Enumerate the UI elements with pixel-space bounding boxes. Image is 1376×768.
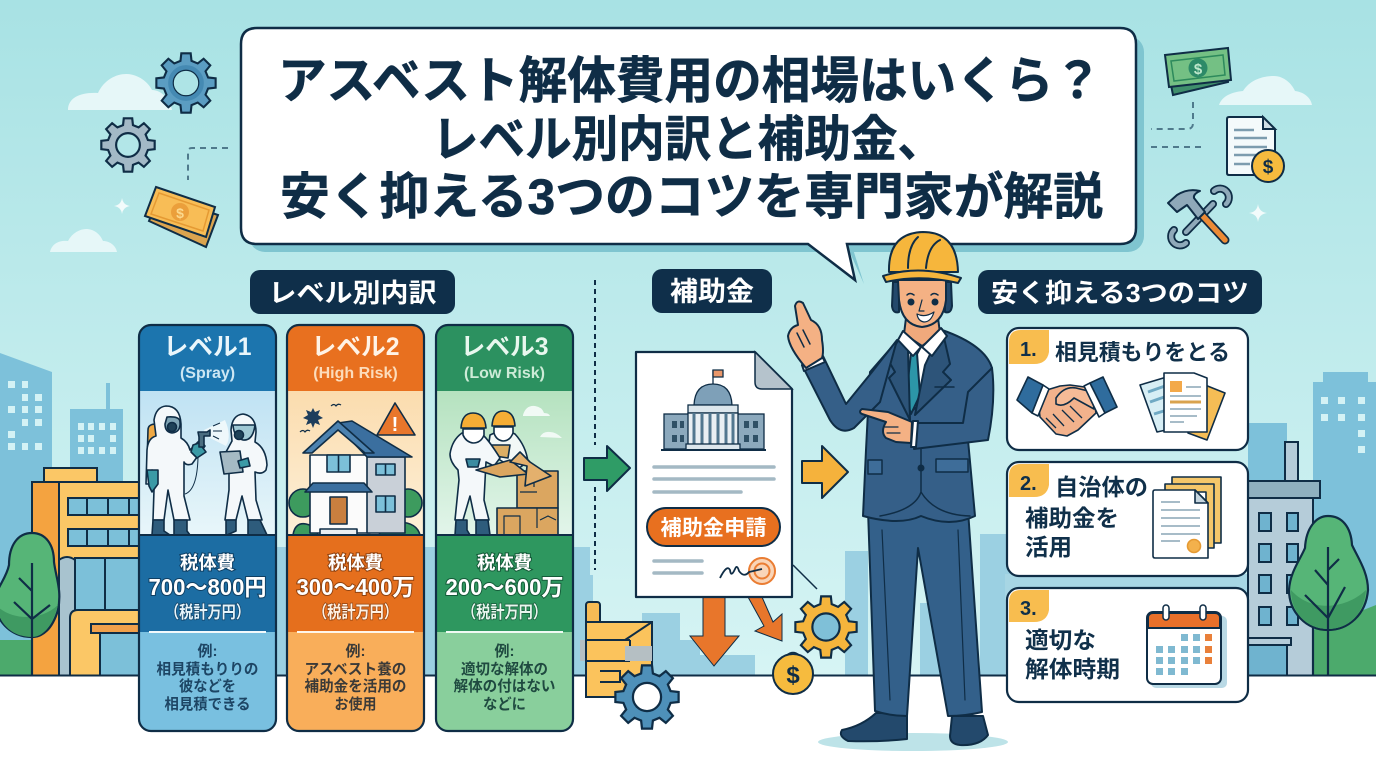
right building — [1240, 442, 1320, 676]
subsidy application pill — [647, 508, 780, 546]
panel: level 2 — [287, 325, 424, 731]
tip 3 text — [1025, 627, 1120, 682]
arrow: green to subsidy — [584, 446, 630, 491]
title line 1: アスベスト解体費用の相場はいくら？ — [278, 53, 1102, 109]
level 2 example text — [304, 643, 406, 713]
tip 2 text: 活用 — [1025, 534, 1072, 560]
level 3 price label: 税体費 — [477, 553, 532, 573]
icon: quotation documents — [1140, 373, 1225, 440]
level 3 example text — [454, 643, 556, 713]
panel: tip 3 — [1007, 588, 1248, 702]
level 3 subtitle: (Low Risk) — [464, 365, 545, 382]
shirt and tie — [903, 330, 942, 410]
level 1 example text: 相見積できる — [164, 695, 250, 713]
heading: subsidy — [652, 269, 772, 313]
level 2 price note: （税計万円） — [313, 603, 398, 622]
tip 2 text — [1025, 474, 1148, 560]
level 3 example text: 適切な解体の — [461, 660, 548, 678]
arrow: orange down — [690, 596, 739, 666]
level 3 example text: 解体の付はない — [454, 678, 556, 695]
title line 3: 安く抑える3つのコツを専門家が解説 — [280, 169, 1103, 225]
level 2 heading: レベル2 — [312, 333, 400, 361]
icon: bill document with coin: $ — [1263, 157, 1274, 178]
panel: level 1 — [139, 325, 276, 731]
neck and collar — [904, 318, 940, 346]
level 1 heading: レベル1 — [164, 333, 252, 361]
skyline: left buildings — [0, 353, 123, 679]
illustration: workers handling debris — [450, 406, 562, 535]
icon: dollar coin — [773, 652, 813, 694]
pointing hand — [860, 409, 912, 443]
icon: sparkle right — [1249, 204, 1267, 222]
icon: dollar coin: $ — [786, 662, 800, 689]
connector line to yellow gear — [793, 565, 817, 589]
level 1 example text: 相見積もりりの — [156, 660, 258, 678]
right tree — [1289, 516, 1376, 676]
level 3 heading: レベル3 — [460, 333, 548, 361]
panel: subsidy document — [636, 352, 792, 597]
tip 1 text: 相見積もりをとる — [1055, 340, 1230, 365]
hard hat — [889, 232, 958, 272]
icon: application documents with seal — [1153, 477, 1221, 558]
title line 2: レベル別内訳と補助金、 — [432, 113, 944, 167]
shoes — [841, 713, 907, 741]
tip 2 text: 自治体の — [1055, 474, 1148, 500]
level 2 price: 300〜400万 — [296, 574, 414, 600]
warning mark: ! — [392, 414, 398, 436]
jacket — [863, 330, 992, 522]
heading: three tips: 安く抑える3つのコツ — [991, 278, 1249, 308]
tip 3 number — [1009, 590, 1049, 622]
left orange building — [32, 468, 142, 676]
level 3 example text: などに — [483, 696, 526, 713]
heading: subsidy: 補助金 — [670, 277, 754, 307]
panel: level 3 — [436, 325, 573, 731]
left tree — [0, 533, 59, 676]
level 1 example text: 彼などを — [179, 678, 236, 695]
panel: tip 2 — [1007, 462, 1248, 576]
tip 2 text: 補助金を — [1025, 505, 1119, 531]
ground — [0, 674, 1376, 768]
icon: grey gear — [101, 118, 155, 172]
level 2 example text: 補助金を活用の — [304, 677, 406, 695]
skyline: right buildings — [1248, 372, 1376, 676]
level 3 example text: 例: — [494, 643, 514, 660]
level 1 price note: （税計万円） — [165, 603, 250, 622]
illustration: expert in suit and hard hat — [788, 232, 1008, 751]
clouds — [50, 74, 1312, 252]
raised arm — [802, 340, 897, 431]
raised hand — [788, 302, 823, 368]
level 2 example text: アスベスト養の — [304, 660, 406, 678]
icon: green banknotes: $ — [1194, 61, 1203, 78]
trousers — [868, 510, 982, 716]
title callout bubble — [241, 28, 1144, 284]
level 1 subtitle: (Spray) — [180, 365, 235, 382]
level 2 subtitle: (High Risk) — [313, 365, 398, 382]
illustration: workers in protective suits spraying — [146, 406, 267, 535]
icon: yellow gear — [795, 596, 857, 658]
icon: bill document with coin — [1227, 117, 1284, 182]
level 2 example text: お使用 — [334, 695, 376, 713]
level 2 price label: 税体費 — [328, 553, 383, 573]
heading: level breakdown — [250, 270, 455, 314]
face — [898, 280, 946, 327]
icon: government building — [661, 370, 766, 450]
illustration: house with warning sign — [289, 403, 422, 535]
lapels — [887, 333, 910, 420]
icon: calendar — [1147, 605, 1227, 688]
level 1 price: 700〜800円 — [148, 574, 266, 600]
skyline: centre buildings — [130, 534, 1255, 676]
panel: tip 1 — [1007, 328, 1248, 450]
signature and stamp — [720, 557, 776, 585]
level 2 example text: 例: — [346, 643, 366, 660]
hair and ears — [892, 282, 952, 312]
tip 3 text: 解体時期 — [1025, 656, 1120, 682]
level 1 price label: 税体費 — [180, 553, 235, 573]
tip 1 number: 1. — [1020, 339, 1037, 361]
level 1 example text — [156, 643, 258, 713]
tip 3 text: 適切な — [1025, 627, 1096, 653]
tip 1 number — [1009, 330, 1049, 364]
heading: three tips — [978, 270, 1262, 314]
pointing arm — [914, 368, 993, 449]
icon: handshake — [1017, 377, 1117, 436]
icon: blue gear — [156, 53, 216, 113]
arrow: yellow to expert — [802, 446, 848, 498]
arrow: orange diagonal — [748, 597, 782, 641]
icon: blue gear bottom — [615, 665, 679, 729]
level 3 price: 200〜600万 — [446, 574, 564, 600]
tip 2 number — [1009, 464, 1049, 497]
icon: hammer and wrench — [1168, 189, 1229, 245]
icon: green banknotes — [1165, 48, 1231, 95]
subsidy application pill: 補助金申請 — [660, 517, 766, 540]
heading: level breakdown: レベル別内訳 — [268, 278, 436, 308]
icon: orange banknotes: $ — [176, 205, 184, 221]
box pile and pipes — [580, 602, 652, 697]
level 1 example text: 例: — [198, 643, 218, 660]
icon: orange banknotes — [145, 187, 218, 247]
dashed connectors — [188, 102, 1206, 570]
level 3 price note: （税計万円） — [462, 603, 547, 622]
icon: sparkle left — [114, 198, 130, 214]
tip 3 number: 3. — [1020, 598, 1037, 620]
tip 2 number: 2. — [1020, 473, 1037, 495]
